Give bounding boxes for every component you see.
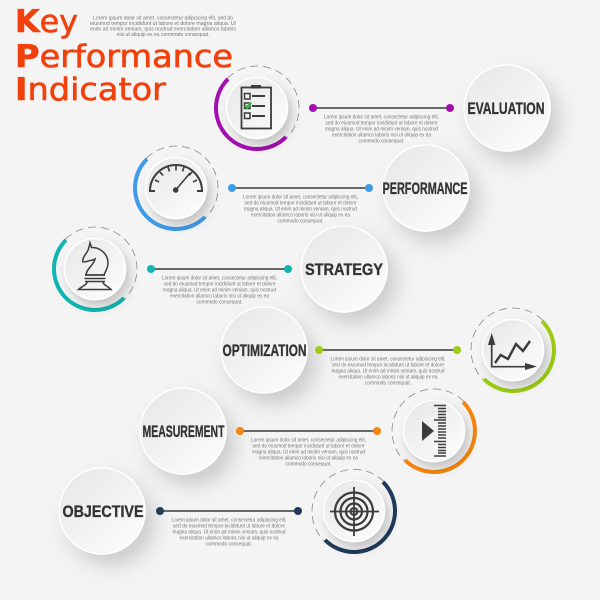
text: evaluation: sed do eiusmod tempor incididunt ut labore et dolore xyxy=(326,120,438,126)
text: measurement: sed do eiusmod tempor incididunt ut labore et dolore xyxy=(252,444,365,450)
text: objective: Lorem ipsum dolor sit amet, consectetur adipiscing elit, xyxy=(172,518,286,524)
text: optimization: commodo consequat. xyxy=(365,380,411,386)
text: measurement xyxy=(251,438,366,468)
title: Key xyxy=(15,4,78,40)
text: performance: Lorem ipsum dolor sit amet, consectetur adipiscing elit, xyxy=(243,194,358,200)
text: optimization: exercitation ullamco laboris nisi ut aliquip ex ea xyxy=(338,374,438,380)
text: performance: sed do eiusmod tempor incididunt ut labore et dolore xyxy=(244,200,357,206)
intro text xyxy=(90,16,237,38)
label: objective: OBJECTIVE xyxy=(62,502,144,521)
text: performance: commodo consequat. xyxy=(278,218,324,224)
text: strategy xyxy=(162,276,277,306)
big circle: measurement xyxy=(140,388,226,474)
ring: evaluation xyxy=(216,66,299,149)
disc: measurement xyxy=(404,400,464,462)
label: measurement: MEASUREMENT xyxy=(142,422,225,441)
label: evaluation: EVALUATION xyxy=(468,99,544,118)
step: performance xyxy=(135,145,469,231)
big circle: performance xyxy=(383,145,469,231)
connector: optimization xyxy=(315,346,461,354)
icon: ruler with play marker xyxy=(422,406,446,456)
text: evaluation: exercitation ullamco laboris nisi ut aliquip ex ea xyxy=(332,132,431,138)
text: measurement: exercitation ullamco laboris nisi ut aliquip ex ea xyxy=(259,456,358,462)
disc: objective xyxy=(324,480,384,542)
text: optimization: sed do eiusmod tempor incididunt ut labore et dolore xyxy=(332,362,444,368)
title: Indicator xyxy=(15,72,166,108)
ring: strategy xyxy=(54,227,137,310)
text: objective: commodo consequat. xyxy=(206,542,252,548)
text: performance: exercitation ullamco laboris nisi ut aliquip ex ea xyxy=(251,212,350,218)
intro text: nisi ut aliquip ex ea commodo consequat. xyxy=(116,32,210,38)
icon: target xyxy=(330,487,379,536)
text: measurement: Lorem ipsum dolor sit amet, consectetur adipiscing elit, xyxy=(251,438,366,444)
disc: optimization xyxy=(482,320,544,380)
big circle: strategy xyxy=(301,226,387,312)
text: strategy: commodo consequat. xyxy=(196,300,242,306)
text: objective: magna aliqua. Ut enim ad minim veniam, quis nostrud xyxy=(172,530,286,536)
ring: optimization xyxy=(471,308,554,391)
disc: performance xyxy=(146,158,206,218)
disc: strategy xyxy=(64,238,126,300)
ring: measurement xyxy=(392,389,475,472)
text: optimization: Lorem ipsum dolor sit amet, consectetur adipiscing elit, xyxy=(330,356,446,362)
step: optimization xyxy=(221,307,554,393)
icon: clipboard xyxy=(242,85,271,128)
title: Performance xyxy=(15,39,233,75)
step: objective xyxy=(59,468,395,554)
text: evaluation: commodo consequat. xyxy=(358,138,404,144)
text: objective: exercitation ullamco laboris nisi ut aliquip ex ea xyxy=(180,536,279,542)
text: strategy: exercitation ullamco laboris nisi ut aliquip ex ea xyxy=(170,294,269,300)
text: performance: magna aliqua. Ut enim ad minim veniam, quis nostrud xyxy=(244,206,357,212)
text: measurement: commodo consequat. xyxy=(286,462,332,468)
text: evaluation: magna aliqua. Ut enim ad minim veniam, quis nostrud xyxy=(325,126,438,132)
intro text: eiusmod tempor incididunt ut labore et dolore magna aliqua. Ut xyxy=(90,21,237,27)
big circle: evaluation xyxy=(464,65,550,151)
connector: strategy xyxy=(147,265,292,273)
big circle: objective xyxy=(59,468,145,554)
text: objective: sed do eiusmod tempor incididunt ut labore et dolore xyxy=(173,524,285,530)
label: performance: PERFORMANCE xyxy=(382,179,468,198)
big circle: optimization xyxy=(221,307,307,393)
connector: measurement xyxy=(236,427,381,435)
ring: performance xyxy=(135,146,218,229)
connector: evaluation xyxy=(309,104,454,112)
text: strategy: sed do eiusmod tempor incididunt ut labore et dolore xyxy=(164,282,276,288)
text: objective xyxy=(172,518,286,548)
intro text: Lorem ipsum dolor sit amet, consectetur adipiscing elit, sed do xyxy=(93,16,233,22)
text: strategy: magna aliqua. Ut enim ad minim veniam, quis nostrud xyxy=(163,288,276,294)
title xyxy=(15,4,233,108)
step: evaluation xyxy=(216,65,550,151)
text: strategy: Lorem ipsum dolor sit amet, consectetur adipiscing elit, xyxy=(162,276,277,282)
disc: evaluation xyxy=(226,78,288,138)
text: optimization xyxy=(330,356,446,386)
step: strategy xyxy=(54,226,387,312)
text: evaluation xyxy=(324,114,439,144)
text: optimization: magna aliqua. Ut enim ad minim veniam, quis nostrud xyxy=(332,368,445,374)
text: measurement: magna aliqua. Ut enim ad minim veniam, quis nostrud xyxy=(252,450,365,456)
label: optimization: OPTIMIZATION xyxy=(222,341,306,360)
icon: chess knight xyxy=(78,243,111,290)
icon: line chart xyxy=(488,333,537,370)
icon: gauge xyxy=(149,165,203,193)
step: measurement xyxy=(140,388,475,474)
label: strategy: STRATEGY xyxy=(305,260,384,279)
text: performance xyxy=(243,194,358,224)
intro text: enim ad minim veniam, quis nostrud exercitation ullamco laboris xyxy=(90,26,237,32)
text: evaluation: Lorem ipsum dolor sit amet, consectetur adipiscing elit, xyxy=(324,114,439,120)
ring: objective xyxy=(312,469,395,552)
connector: objective xyxy=(156,507,302,515)
connector: performance xyxy=(228,184,373,192)
